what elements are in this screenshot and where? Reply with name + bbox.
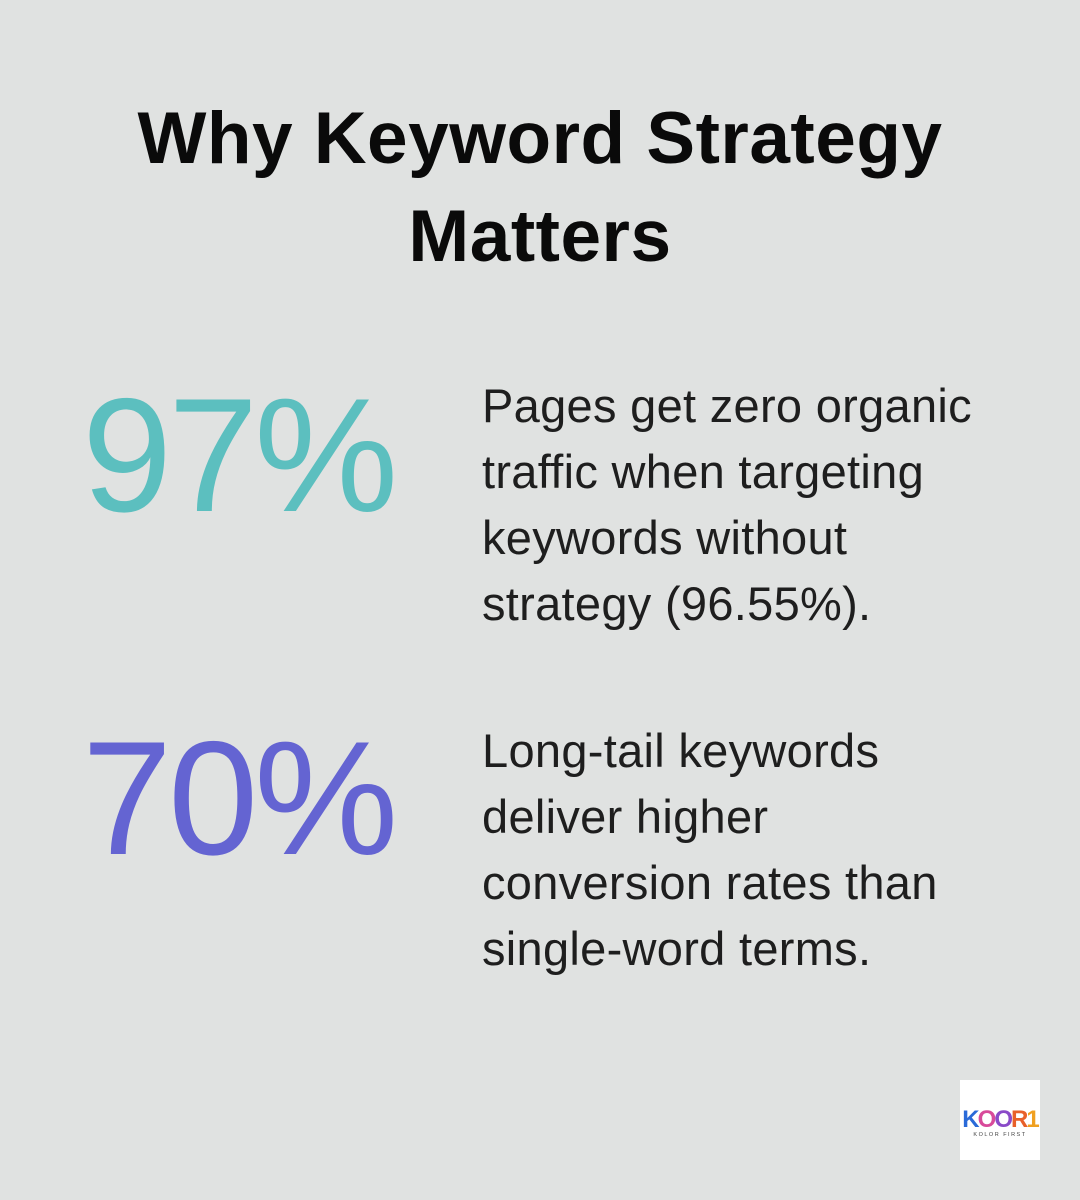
text: 97% description — [482, 379, 972, 630]
text: 97% description: keywords without — [482, 511, 847, 564]
text: 97% description: traffic when targeting — [482, 445, 924, 498]
title — [137, 98, 943, 277]
text: 70% description: conversion rates than — [482, 856, 938, 909]
text: 70% description: Long-tail keywords — [482, 724, 879, 777]
text: 97% description: Pages get zero organic — [482, 379, 972, 432]
text: 97% description: strategy (96.55%). — [482, 577, 871, 630]
text: 70% description — [482, 724, 938, 975]
logo — [960, 1080, 1040, 1160]
logo: KOLOR FIRST — [973, 1132, 1027, 1138]
title: Why Keyword Strategy — [137, 98, 943, 179]
text: 70% description: deliver higher — [482, 790, 768, 843]
title: Matters — [408, 196, 672, 277]
text: 70% description: single-word terms. — [482, 922, 871, 975]
logo: KOOR1 — [962, 1106, 1039, 1133]
stat: 97%: 97% — [82, 365, 394, 546]
stat: 70%: 70% — [82, 708, 394, 889]
